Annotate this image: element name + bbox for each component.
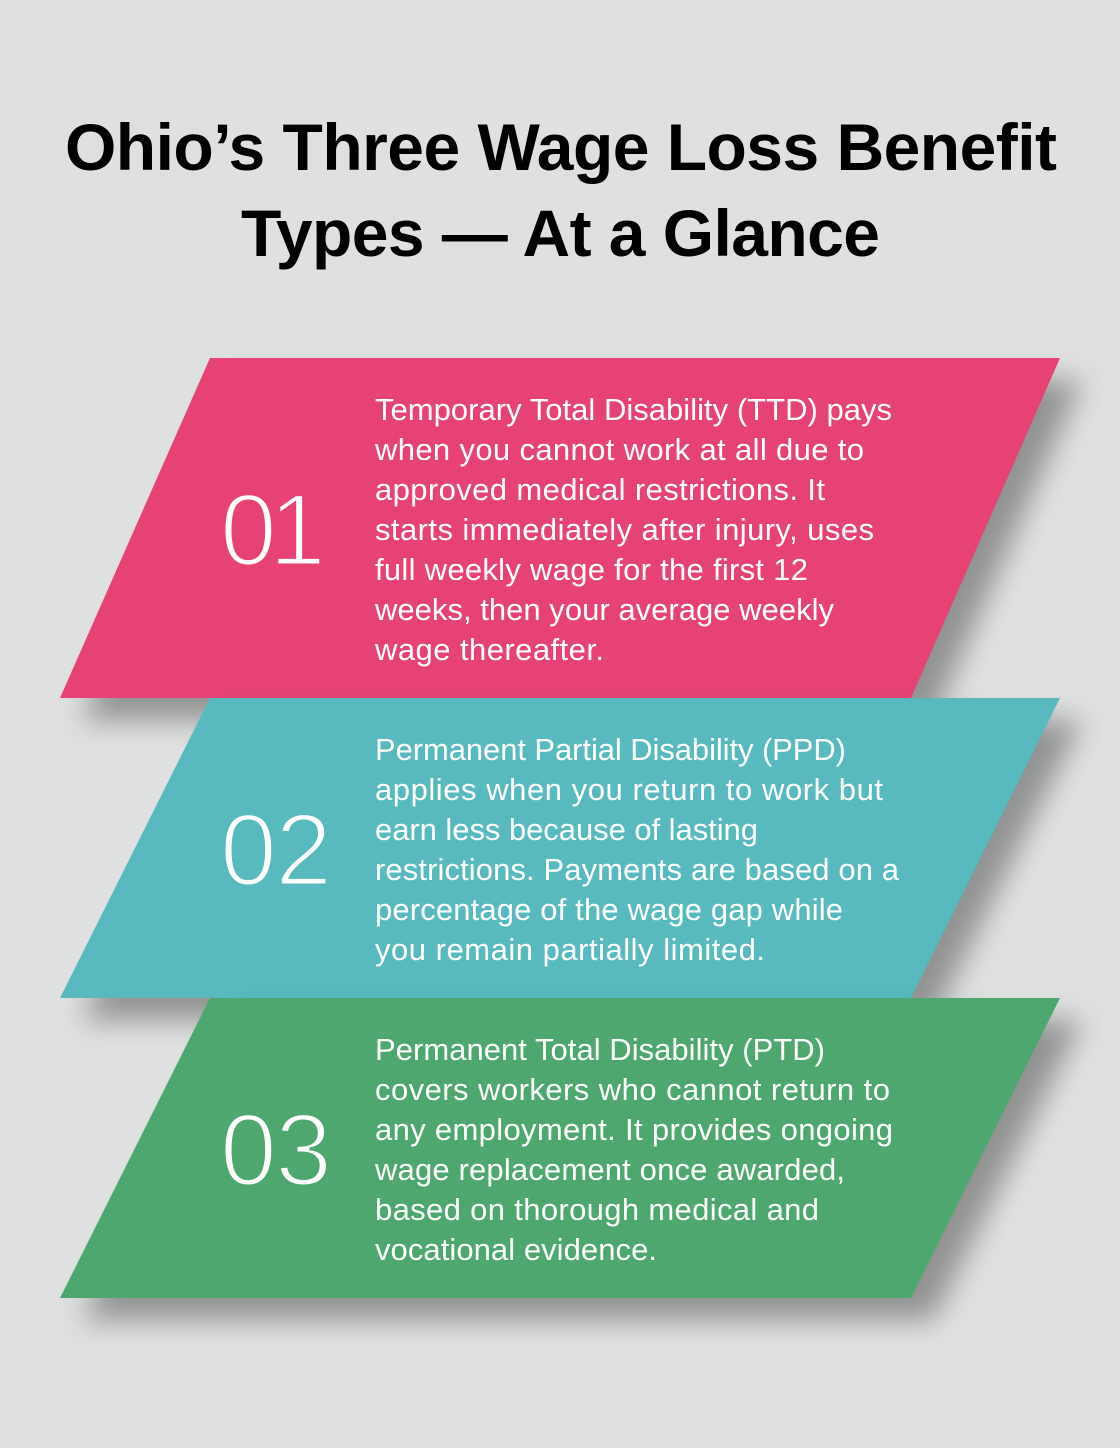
description 02: applies when you return to work but (375, 772, 883, 807)
description 01: wage thereafter. (374, 632, 604, 667)
description 01: weeks, then your average weekly (374, 592, 834, 627)
description 03: any employment. It provides ongoing (375, 1112, 893, 1147)
number 03: 03 (220, 1093, 332, 1207)
description 01: approved medical restrictions. It (375, 472, 825, 507)
description 02: restrictions. Payments are based on a (375, 852, 900, 887)
pink parallelogram (60, 358, 1060, 698)
description 02 (375, 732, 900, 967)
description 01: full weekly wage for the first 12 (375, 552, 808, 587)
teal parallelogram (60, 698, 1060, 998)
title: Ohio’s Three Wage Loss Benefit (65, 110, 1057, 184)
description 02: percentage of the wage gap while (375, 892, 843, 927)
description 02: Permanent Partial Disability (PPD) (375, 732, 846, 767)
description 01: Temporary Total Disability (TTD) pays (375, 392, 892, 427)
description 01: when you cannot work at all due to (374, 432, 864, 467)
description 03: vocational evidence. (375, 1232, 657, 1267)
description 03 (374, 1032, 893, 1267)
description 02: earn less because of lasting (375, 812, 758, 847)
green parallelogram (60, 998, 1060, 1298)
description 03: based on thorough medical and (375, 1192, 819, 1227)
description 02: you remain partially limited. (375, 932, 765, 967)
description 03: wage replacement once awarded, (374, 1152, 845, 1187)
title: Types — At a Glance (241, 196, 880, 270)
description 01: starts immediately after injury, uses (375, 512, 874, 547)
number 01: 01 (220, 473, 326, 587)
panel: 03 permanent total disability (60, 998, 1082, 1320)
description 01 (374, 392, 892, 667)
description 03: covers workers who cannot return to (375, 1072, 890, 1107)
description 03: Permanent Total Disability (PTD) (375, 1032, 825, 1067)
title (65, 110, 1057, 270)
panel: 02 permanent partial disability (60, 698, 1082, 1020)
number 02: 02 (220, 793, 332, 907)
panel: 01 temporary total disability (60, 358, 1082, 720)
